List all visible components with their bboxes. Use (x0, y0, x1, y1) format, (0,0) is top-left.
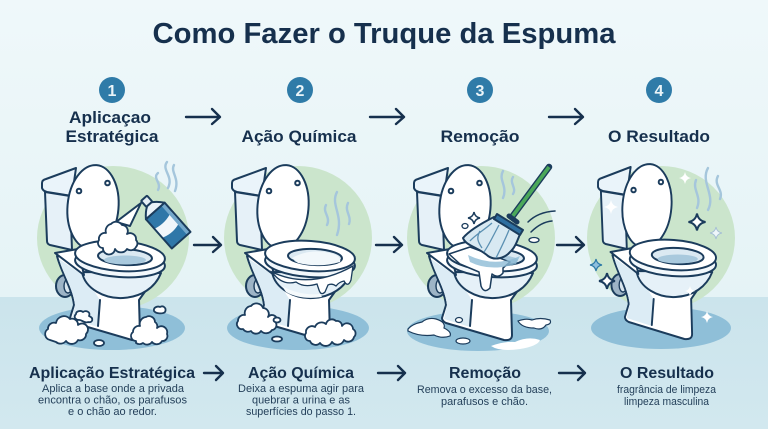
sparkle on lid (468, 212, 480, 224)
illustration: step 2, chemical action (224, 163, 372, 350)
step 1 header (66, 77, 159, 146)
floor puddle (39, 306, 185, 350)
toilet (232, 163, 356, 340)
motion lines (528, 211, 555, 232)
caption text: quebrar a urina e as (252, 394, 350, 406)
toilet (42, 163, 166, 340)
arrow 2 to 3, middle row (376, 237, 402, 252)
spray cone (116, 203, 141, 226)
green circle (587, 166, 735, 310)
caption text: Aplica a base onde a privada (42, 383, 185, 395)
vapour wisps (156, 162, 176, 191)
strands (463, 217, 521, 259)
caption heading: Aplicação Estratégica (29, 365, 195, 382)
floor foam (45, 306, 167, 346)
floor foam (237, 303, 356, 346)
caption text: parafusos e chão. (441, 396, 528, 408)
step 3 name: Remoção (440, 127, 520, 146)
foam on bowl body (282, 286, 322, 298)
foam in bowl (292, 251, 340, 265)
handle (512, 167, 549, 217)
caption heading: O Resultado (620, 365, 714, 382)
caption text: fragrância de limpeza (617, 384, 717, 396)
vapour wisps (325, 192, 350, 235)
mop (463, 167, 549, 259)
caption text: encontra o chão, os parafusos (38, 394, 188, 406)
toilet (598, 162, 717, 339)
caption text: e o chão ao redor. (68, 406, 157, 418)
band (494, 214, 523, 235)
green circle (407, 166, 555, 310)
illustration: step 4, the clean result (587, 162, 735, 349)
badge 1: 1 (108, 83, 117, 100)
illustration: step 3, removal with mop (407, 163, 555, 351)
arrow 2 to 3, bottom row (378, 366, 405, 380)
caption: step 1 (29, 365, 195, 418)
caption text: Remova o excesso da base, (417, 384, 552, 396)
step 1 name: Aplicaçao (69, 108, 151, 127)
step 4 header (608, 77, 710, 146)
caption: step 3 (417, 365, 552, 408)
caption: step 2 (238, 365, 365, 418)
floor spills (408, 318, 550, 350)
step 2 name: Ação Química (242, 127, 357, 146)
arrow 1 to 2, top row (186, 109, 220, 124)
splash drop (462, 224, 468, 228)
caption text: limpeza masculina (624, 396, 710, 408)
badge 3: 3 (476, 83, 485, 100)
badge 4: 4 (655, 83, 664, 100)
step 2 header (242, 77, 357, 146)
floor (0, 297, 768, 429)
caption text: superfícies do passo 1. (246, 406, 356, 418)
green circle (224, 166, 372, 310)
caption: step 4 (617, 365, 717, 408)
toilet (414, 163, 538, 340)
sparkles (590, 172, 722, 323)
arrow 3 to 4, bottom row (559, 366, 585, 380)
arrow 3 to 4, top row (549, 109, 583, 124)
arrow 1 to 2, bottom row (204, 366, 223, 380)
caption text: Deixa a espuma agir para (238, 383, 365, 395)
spray can (135, 190, 191, 248)
background wall (0, 0, 768, 298)
caption heading: Remoção (449, 365, 521, 382)
green circle (37, 166, 189, 310)
step 4 name: O Resultado (608, 127, 710, 146)
title: Como Fazer o Truque da Espuma (152, 18, 616, 50)
arrow 2 to 3, top row (370, 109, 404, 124)
illustration: step 1, foam application (37, 162, 191, 350)
foam on seat (98, 222, 137, 255)
residue on seat (468, 255, 520, 268)
floor puddle (407, 311, 549, 351)
floor puddle (227, 306, 369, 350)
vapour wisps (695, 168, 721, 210)
step 3 header (440, 77, 520, 146)
badge 2: 2 (296, 83, 305, 100)
arrow 1 to 2, middle row (194, 237, 221, 252)
caption heading: Ação Química (248, 365, 354, 382)
arrow 3 to 4, middle row (557, 237, 584, 252)
vapour wisps (502, 171, 514, 198)
step 1 name: Estratégica (66, 127, 159, 146)
floor puddle (591, 307, 731, 349)
dripping residue (449, 247, 510, 291)
foam drips (272, 266, 353, 294)
